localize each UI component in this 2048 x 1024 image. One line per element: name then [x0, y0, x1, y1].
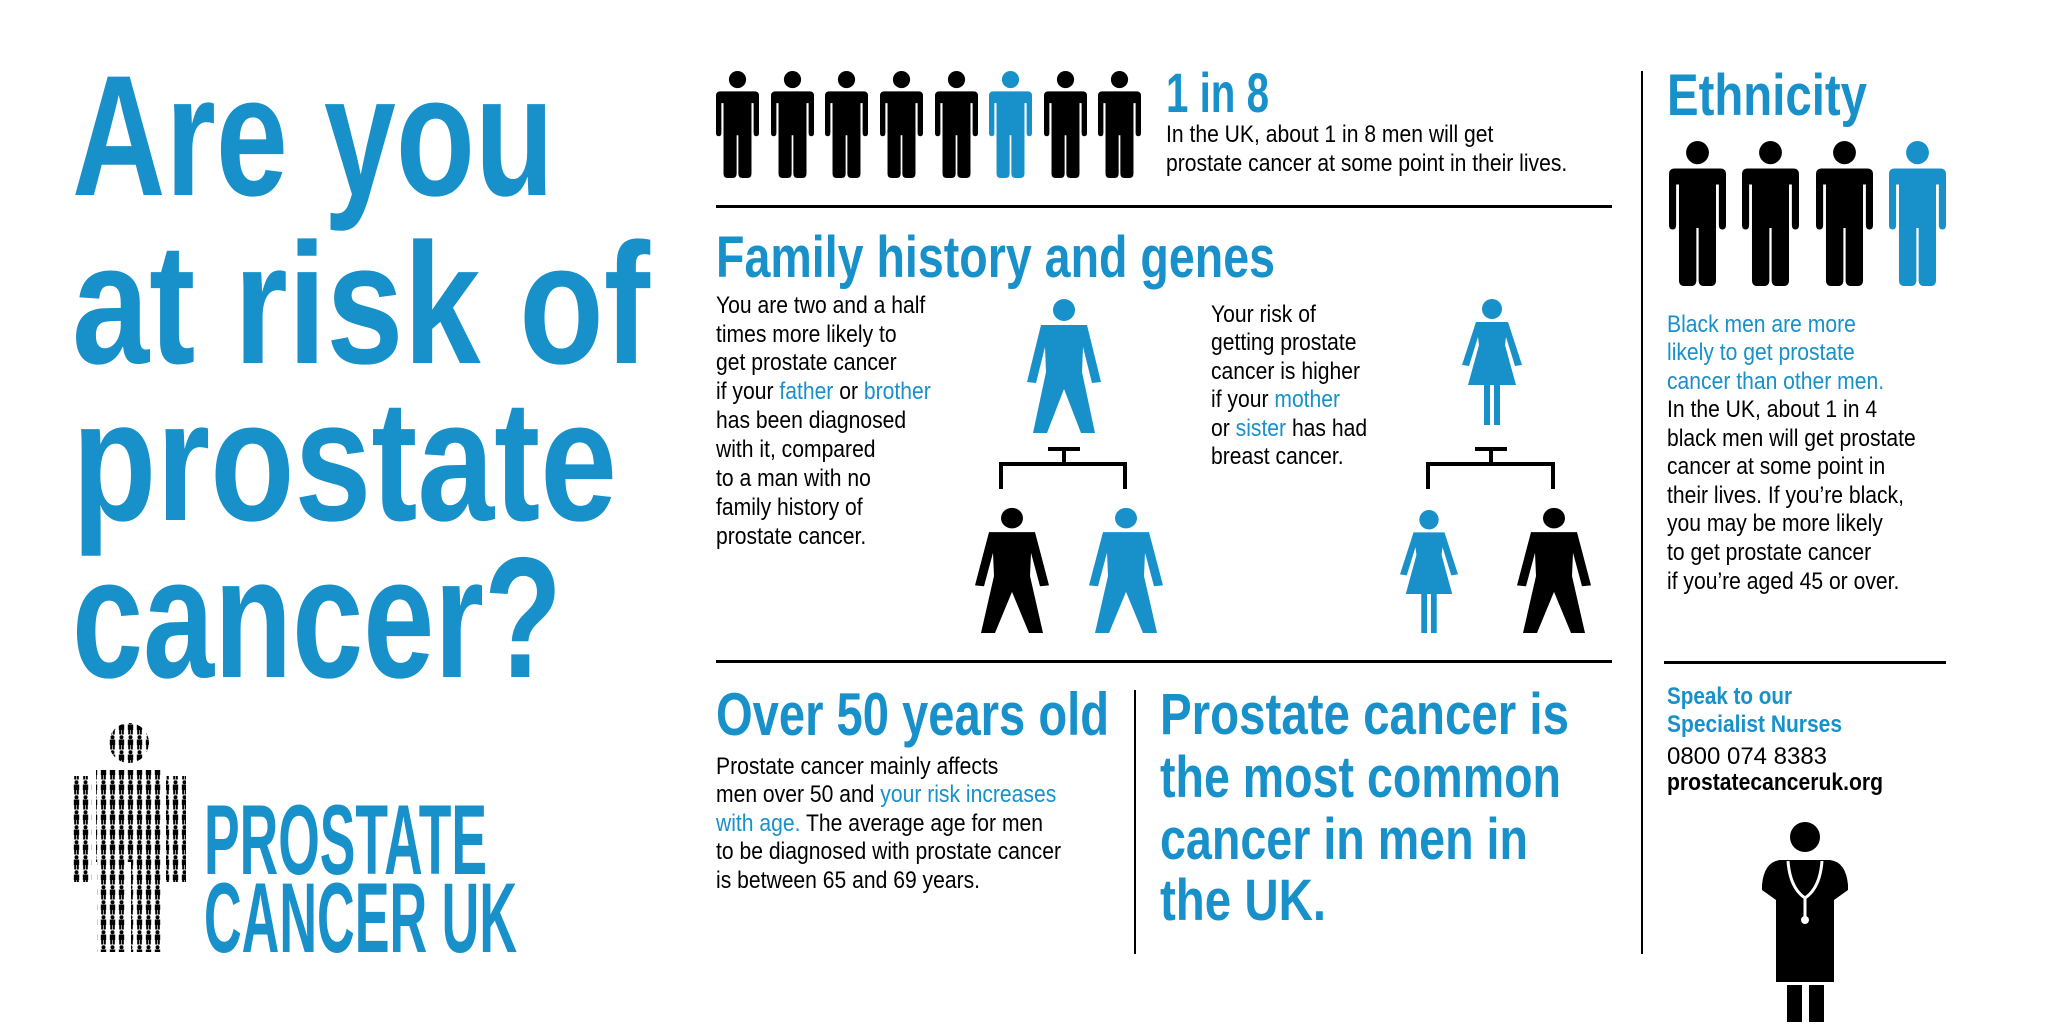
text: mother/sister: getting prostate	[1211, 329, 1357, 355]
text: father/brother: has been diagnosed	[716, 407, 906, 433]
text: father/brother: times more likely to	[716, 321, 897, 347]
text: mother/sister: if your mother	[1211, 386, 1340, 412]
logo wordmark: PROSTATE	[204, 784, 487, 895]
text: mother/sister: or sister has had	[1211, 415, 1367, 441]
logo: Prostate Cancer UK	[72, 723, 517, 973]
diagram: mother family tree	[1400, 299, 1591, 633]
text: contact: Specialist Nurses	[1667, 711, 1842, 738]
icon row: 1 in 8 men	[716, 71, 1141, 178]
heading: ethnicity: Ethnicity	[1667, 63, 1867, 128]
text: mother/sister	[1211, 301, 1367, 469]
text: father/brother: family history of	[716, 494, 863, 520]
callout: most common cancer: the most common	[1160, 745, 1561, 810]
text: over 50 body: with age. The average age for men	[715, 810, 1043, 836]
title: Are you	[72, 40, 554, 232]
logo wordmark: CANCER UK	[204, 862, 517, 973]
text: ethnicity body: likely to get prostate	[1667, 339, 1855, 365]
title	[72, 40, 651, 714]
text: father/brother: to a man with no	[716, 465, 871, 491]
title: cancer?	[72, 522, 562, 714]
text: contact	[1667, 683, 1883, 796]
text: over 50 body	[715, 753, 1061, 893]
text: 1 in 8 body	[1166, 121, 1567, 176]
text: 1 in 8 body: In the UK, about 1 in 8 men will get	[1166, 121, 1494, 147]
heading: over 50: Over 50 years old	[716, 681, 1109, 748]
heading: 1 in 8: 1 in 8	[1166, 61, 1269, 124]
icon: nurse	[1762, 822, 1848, 1022]
heading: family history: Family history and genes	[716, 225, 1275, 290]
text: ethnicity body: to get prostate cancer	[1667, 539, 1872, 565]
logo wordmark	[204, 784, 517, 973]
text: father/brother: get prostate cancer	[716, 349, 897, 375]
text: father/brother: You are two and a half	[716, 292, 926, 318]
text: father/brother: with it, compared	[715, 436, 876, 462]
text: over 50 body: to be diagnosed with prostate cancer	[716, 838, 1061, 864]
callout: most common cancer	[1160, 682, 1569, 933]
title: prostate	[72, 365, 617, 557]
text: father/brother: prostate cancer.	[716, 523, 866, 549]
text: mother/sister: Your risk of	[1211, 301, 1316, 327]
callout: most common cancer: Prostate cancer is	[1160, 682, 1569, 747]
diagram: father family tree	[975, 299, 1163, 633]
text: over 50 body: is between 65 and 69 years.	[716, 867, 980, 893]
text: ethnicity body: cancer at some point in	[1667, 453, 1885, 479]
callout: most common cancer: cancer in men in	[1160, 807, 1528, 872]
text: ethnicity body: if you’re aged 45 or over.	[1667, 568, 1899, 594]
text: father/brother: if your father or brother	[716, 378, 931, 404]
text: ethnicity body: In the UK, about 1 in 4	[1667, 396, 1877, 422]
text: father/brother	[715, 292, 931, 549]
text: contact: prostatecanceruk.org	[1667, 769, 1883, 796]
text: over 50 body: Prostate cancer mainly affects	[716, 753, 998, 779]
text: 1 in 8 body: prostate cancer at some point in their lives.	[1166, 150, 1567, 176]
icon row: ethnicity men	[1669, 141, 1946, 286]
text: mother/sister: breast cancer.	[1211, 443, 1344, 469]
callout: most common cancer: the UK.	[1160, 868, 1326, 933]
text: ethnicity body: black men will get prostate	[1667, 425, 1916, 451]
text: contact: 0800 074 8383	[1667, 743, 1827, 770]
text: ethnicity body: their lives. If you’re black,	[1667, 482, 1904, 508]
title: at risk of	[72, 208, 651, 400]
text: ethnicity body: cancer than other men.	[1667, 368, 1884, 394]
icon: crowd man figure	[72, 723, 186, 952]
text: contact: Speak to our	[1667, 683, 1792, 710]
text: mother/sister: cancer is higher	[1211, 358, 1360, 384]
text: ethnicity body: you may be more likely	[1667, 510, 1884, 536]
text: ethnicity body	[1667, 311, 1916, 594]
text: ethnicity body: Black men are more	[1667, 311, 1856, 337]
text: over 50 body: men over 50 and your risk increases	[716, 781, 1056, 807]
